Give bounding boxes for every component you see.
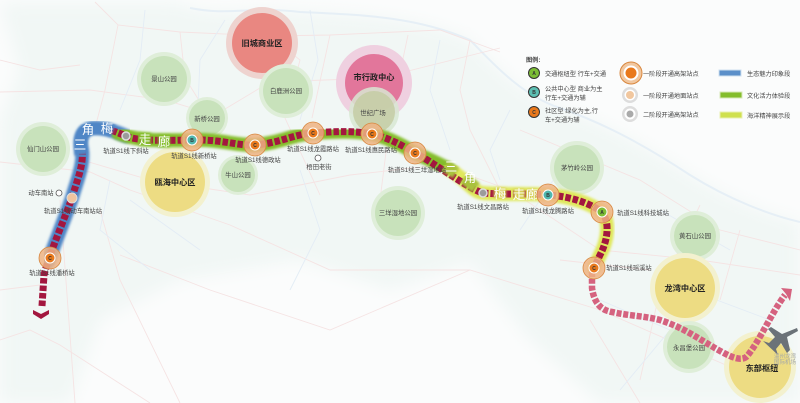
station: Longteng Road: B — [546, 193, 550, 199]
station: Sanyang wetland: C — [413, 151, 417, 157]
station: South high-speed rail station — [44, 193, 103, 215]
legend: phase two elevated station: 二阶段开通高架站点 — [643, 111, 699, 119]
legend: type A: 交通枢纽型 行车+交通 — [545, 70, 606, 78]
station: Yaoxi — [583, 257, 652, 279]
park: Yongchangbao — [663, 321, 715, 373]
station: South high-speed rail station: 轨道S1线动车南站站 — [44, 206, 103, 215]
airport label — [774, 352, 796, 366]
district: municipal administrative center: 市行政中心 — [354, 72, 395, 82]
legend: phase one elevated station: 一阶段开通高架站点 — [643, 70, 699, 78]
corridor title: 三角梅走廊 east: 三 — [445, 160, 457, 174]
station: Tongqiao — [29, 247, 75, 277]
park: Huangshishan — [670, 211, 720, 261]
district: Longwan center — [650, 253, 720, 323]
station: Yaoxi: 轨道S1线瑶溪站 — [606, 263, 652, 272]
legend: type C — [528, 106, 598, 124]
legend: ecological section — [719, 70, 790, 78]
park: Xianmenshan — [16, 122, 70, 176]
legend: type A: A — [532, 71, 536, 77]
station: Huimin Road: C — [370, 132, 374, 138]
second-phase dashed line (pink) — [592, 272, 785, 359]
station: Deshi — [235, 134, 281, 164]
legend: type B: 公共中心型 商业为主 — [545, 85, 602, 93]
corridor title: 三角梅走廊 west: 走 — [139, 133, 152, 147]
legend title: 图例: — [526, 56, 540, 64]
park: Jingshan: 景山公园 — [151, 74, 177, 83]
park: Yongchangbao: 永昌堡公园 — [673, 343, 705, 352]
station: Deshi: 轨道S1线德政站 — [235, 155, 281, 164]
corridor title: 三角梅走廊 east: 走 — [513, 188, 526, 202]
legend: phase two elevated station — [622, 106, 699, 122]
airport label: 国际机场 — [774, 358, 796, 366]
station: Longteng Road: 轨道S1线龙腾路站 — [522, 206, 575, 215]
district: Longwan center: 龙湾中心区 — [665, 283, 705, 293]
corridor band: ecological charm section (blue) — [48, 128, 126, 262]
legend: type B — [528, 85, 602, 102]
district: old city commercial area — [226, 7, 298, 79]
park: Sanyang wetland — [371, 186, 425, 240]
legend: ecological section: 生态魅力印象段 — [747, 70, 790, 78]
legend: type C: 车+交通为辅 — [545, 116, 580, 124]
landmark: old street: 梧田老街 — [306, 162, 332, 171]
district: municipal administrative center — [336, 45, 412, 121]
icon: airplane — [763, 327, 798, 355]
station: Wenchang Road: 轨道S1线文昌路站 — [457, 202, 510, 211]
park: Bailuzhou: 白鹿洲公园 — [270, 86, 302, 95]
park: Xianmenshan: 仙门山公园 — [27, 144, 59, 153]
station: Xinqiao: 轨道S1线新桥站 — [171, 151, 217, 160]
legend: maritime section — [720, 112, 790, 120]
corridor title: 三角梅走廊 east: 角 — [464, 171, 476, 185]
landmark: old street — [306, 155, 332, 171]
corridor title: 三角梅走廊 east: 廊 — [526, 187, 538, 202]
park: Niushan — [218, 155, 258, 195]
station: Deshi: C — [253, 143, 257, 149]
district: Ouhai center: 瓯海中心区 — [155, 177, 195, 187]
station: Sanyang wetland: 轨道S1线三垟湿地站 — [388, 165, 447, 174]
station: Science and Technology City: 轨道S1线科技城站 — [617, 208, 670, 217]
station: Tongqiao: 轨道S1线潘桥站 — [29, 268, 75, 277]
corridor band: cultural vitality section (green) — [118, 132, 450, 170]
legend: type B: B — [532, 90, 536, 96]
corridor title: 三角梅走廊 west — [74, 121, 170, 152]
station: Longteng Road — [522, 184, 575, 215]
legend: type B: 行车+交通为辅 — [545, 94, 586, 102]
park: Bailuzhou — [259, 64, 313, 118]
station: Sanyang wetland — [388, 142, 447, 174]
district: old city commercial area: 旧城商业区 — [242, 38, 282, 48]
park: Xinqiao — [186, 97, 228, 139]
park: Century Square — [349, 87, 399, 137]
park: Jingshan — [137, 52, 191, 106]
station: Longxia Road: C — [311, 131, 315, 137]
legend: phase one elevated station — [620, 62, 699, 84]
district: eastern hub: 东部枢纽 — [746, 363, 778, 373]
park: Huangshishan: 黄石山公园 — [679, 231, 711, 240]
legend — [526, 56, 790, 124]
airport label: 温州龙湾 — [774, 352, 796, 360]
first-phase dashed line (dark red) — [42, 128, 607, 306]
station: Science and Technology City — [591, 201, 670, 223]
station: Longxia Road: 轨道S1线龙霞路站 — [287, 144, 340, 153]
corridor title: 三角梅走廊 west: 角 — [82, 123, 94, 137]
corridor title: 三角梅走廊 east — [445, 160, 538, 202]
station: Tongqiao: C — [48, 256, 52, 262]
park: Maozhuling: 茅竹岭公园 — [561, 163, 593, 172]
district: Ouhai center — [140, 147, 210, 217]
district: eastern hub — [724, 331, 796, 403]
park: Niushan: 牛山公园 — [225, 170, 251, 179]
corridor title: 三角梅走廊 west: 廊 — [158, 134, 170, 149]
legend: type A — [528, 68, 606, 78]
legend: type C: 社区型 绿化为主,行 — [545, 107, 598, 115]
water channels — [100, 10, 770, 390]
station: Xinqiao: B — [190, 138, 194, 144]
corridor title: 三角梅走廊 west: 三 — [74, 138, 86, 152]
park: Sanyang wetland: 三垟湿地公园 — [379, 208, 417, 217]
legend: type C: C — [532, 110, 536, 116]
legend: cultural section — [720, 92, 790, 100]
park: Maozhuling — [550, 141, 604, 195]
corridor band: maritime spirit section (yellow) — [450, 170, 607, 268]
park: Century Square: 世纪广场 — [360, 108, 386, 117]
station: Xiadou — [103, 132, 149, 155]
arrow: airport end — [781, 288, 792, 301]
corridor title backing patches — [80, 128, 537, 195]
legend: maritime section: 海洋精神展示段 — [747, 112, 790, 120]
station: Yaoxi: C — [592, 266, 596, 272]
corridor title: 三角梅走廊 west: 梅 — [101, 121, 113, 136]
legend: phase one ground station — [622, 87, 699, 103]
legend: phase one ground station: 一阶段开通地面站点 — [643, 92, 699, 100]
landmark: high-speed rail south station: 动车南站 — [28, 188, 54, 197]
corridor title: 三角梅走廊 east: 梅 — [494, 186, 506, 201]
landmark: high-speed rail south station — [28, 188, 62, 197]
station: Wenchang Road — [457, 189, 510, 211]
station: Huimin Road: 轨道S1线惠民路站 — [345, 145, 398, 154]
legend: cultural section: 文化活力体验段 — [747, 92, 790, 100]
station: Science and Technology City: A — [600, 210, 604, 216]
station: Xinqiao — [171, 129, 217, 160]
park: Xinqiao: 新桥公园 — [194, 114, 220, 123]
station: Huimin Road — [345, 123, 398, 154]
station: Xiadou: 轨道S1线下斜站 — [103, 146, 149, 155]
station: Longxia Road — [287, 122, 340, 153]
arrow: south end — [33, 310, 49, 319]
